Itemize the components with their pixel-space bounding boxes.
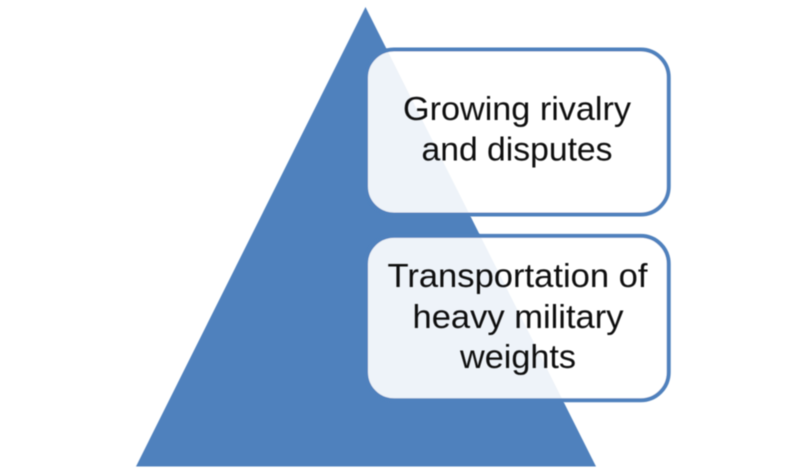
box: growing rivalry and disputes <box>366 50 669 214</box>
triangle: pyramid <box>136 7 596 466</box>
label: and disputes: and disputes <box>422 130 612 168</box>
label: transportation of: Transportation of <box>388 257 648 294</box>
label: heavy military: heavy military <box>412 298 624 335</box>
label: weights: weights <box>459 338 576 375</box>
label: growing rivalry: Growing rivalry <box>403 90 632 127</box>
box: transportation of heavy military weights <box>366 236 669 400</box>
